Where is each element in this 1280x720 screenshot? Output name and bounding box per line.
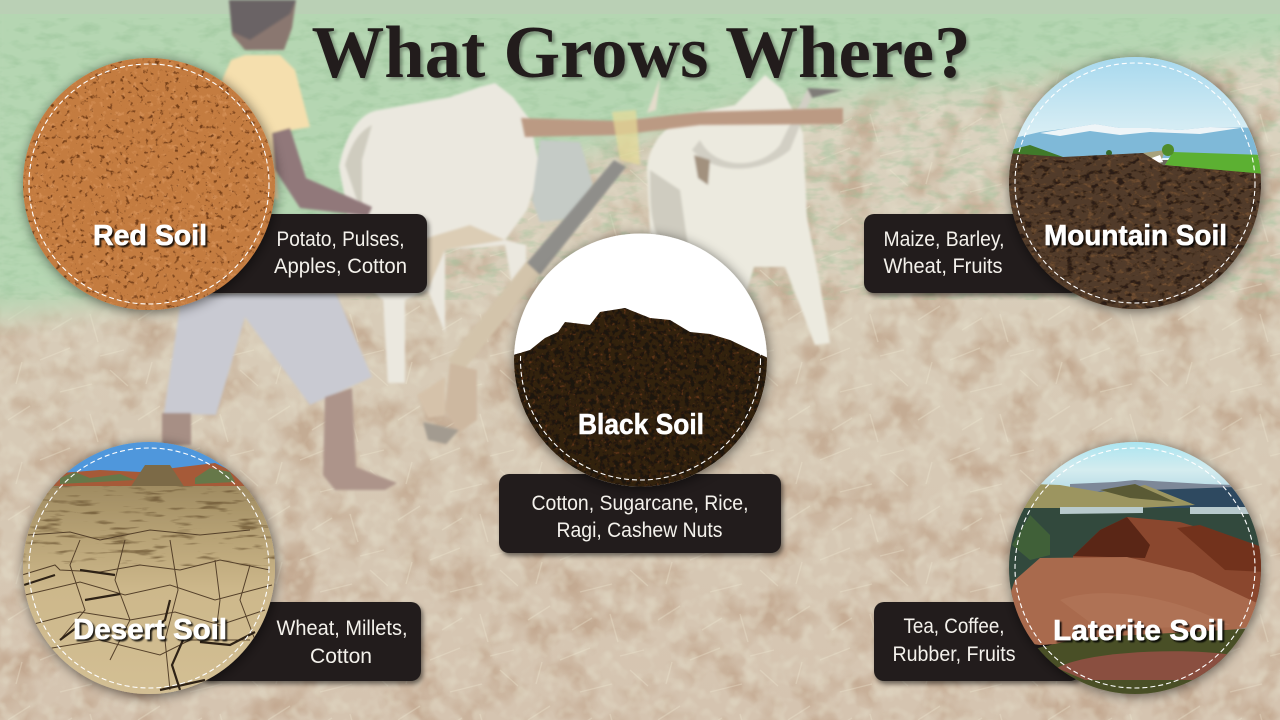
crops caption: mountain soil: Wheat, Fruits [884, 255, 1002, 278]
panel: mountain soil [864, 55, 1265, 315]
label: black soil: Black Soil [578, 409, 704, 441]
crops caption: mountain soil: Maize, Barley, [884, 228, 1004, 251]
farmer [162, 0, 397, 490]
crops caption: desert soil: Cotton [310, 645, 372, 668]
yoke and plough [417, 108, 843, 444]
photo: laterite soil [1005, 440, 1265, 700]
photo: mountain soil [1005, 55, 1265, 315]
panel: laterite soil [874, 440, 1265, 700]
crops caption: desert soil: Wheat, Millets, [276, 617, 408, 640]
crops caption: black soil: Cotton, Sugarcane, Rice, [532, 492, 748, 515]
ox: left [339, 83, 593, 383]
title: What Grows Where? [312, 12, 970, 94]
photo: black soil [510, 230, 772, 492]
crops caption: red soil: Apples, Cotton [274, 255, 407, 278]
label: laterite soil: Laterite Soil [1053, 615, 1224, 647]
crops caption: black soil: Ragi, Cashew Nuts [556, 519, 722, 542]
panel: red soil [20, 55, 427, 315]
crops caption: red soil: Potato, Pulses, [276, 228, 404, 251]
crops caption: black soil [499, 474, 781, 553]
crops caption: mountain soil [864, 214, 1080, 293]
panel: black soil [499, 230, 781, 553]
crops caption: desert soil [200, 602, 421, 681]
label: desert soil: Desert Soil [73, 614, 227, 646]
label: mountain soil: Mountain Soil [1044, 220, 1227, 252]
panel: desert soil [20, 440, 421, 696]
label: red soil: Red Soil [93, 220, 207, 252]
crops caption: laterite soil: Tea, Coffee, [904, 615, 1004, 638]
photo: desert soil [20, 440, 280, 696]
crops caption: laterite soil [874, 602, 1080, 681]
crops caption: red soil [200, 214, 427, 293]
ox: right [647, 75, 843, 345]
crops caption: laterite soil: Rubber, Fruits [892, 643, 1016, 666]
photo: red soil [20, 55, 280, 315]
